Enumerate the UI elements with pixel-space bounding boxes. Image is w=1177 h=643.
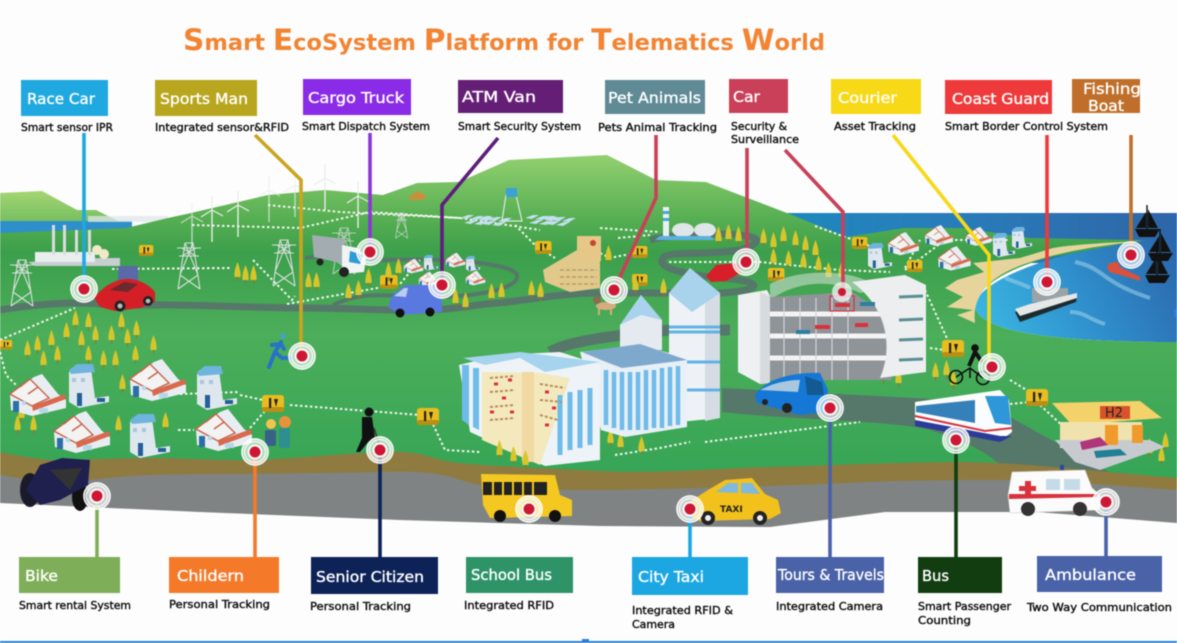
- callout: pet animals: Pet Animals: [608, 89, 701, 107]
- callout: car: Car: [733, 88, 761, 106]
- callout: ambulance: Ambulance: [1045, 566, 1136, 584]
- van: [388, 285, 442, 318]
- callout: children: [169, 438, 279, 611]
- callout: bus: [918, 426, 1011, 627]
- road: lower wide: [722, 388, 1109, 472]
- callout: cargo truck: Cargo Truck: [308, 89, 404, 107]
- ground: [0, 155, 1177, 480]
- callout: courier: [831, 79, 1006, 381]
- tour bus: [755, 373, 828, 415]
- callout: city taxi: City Taxi: [638, 568, 704, 586]
- runner: [269, 334, 290, 367]
- callout: bus: Bus: [922, 567, 949, 585]
- H2 station: [1052, 401, 1165, 470]
- callout: coast guard: Coast Guard: [952, 90, 1049, 108]
- callout: ambulance: [1026, 488, 1172, 614]
- callout: coast guard: Smart Border Control System: [945, 120, 1108, 133]
- solar panels: [460, 215, 576, 226]
- title: Smart EcoSystem Platform for Telematics World: [183, 23, 825, 57]
- callout: sports man: Sports Man: [160, 90, 248, 108]
- callout: senior citizen: Personal Tracking: [310, 600, 411, 613]
- houses: coast cluster: [868, 225, 1032, 271]
- school bus: [481, 474, 572, 522]
- tan factory: [543, 236, 601, 292]
- ambulance: [1008, 465, 1100, 516]
- road: main: [0, 234, 757, 310]
- callout: bus: Smart Passenger: [918, 600, 1011, 613]
- callout: bike: Bike: [25, 567, 58, 585]
- callout: bike: Smart rental System: [19, 599, 131, 612]
- cyclist: [950, 345, 990, 384]
- callout: cargo truck: Smart Dispatch System: [302, 120, 430, 133]
- lagoon: [975, 213, 1177, 342]
- callout: ATM van: ATM Van: [462, 88, 536, 106]
- road: soil band: [0, 452, 1177, 492]
- callout: tours and travels: [776, 394, 884, 613]
- callout: pet animals: [598, 80, 717, 304]
- callout: ATM van: [428, 80, 581, 299]
- city bus: [915, 390, 1012, 442]
- beach: [945, 241, 1143, 323]
- black sailboats: [1135, 205, 1173, 283]
- callout: children: Personal Tracking: [169, 598, 270, 611]
- landscape: [0, 155, 1177, 527]
- trees: [14, 224, 1169, 465]
- senior citizen: [356, 408, 379, 452]
- callout: cargo truck: [302, 79, 430, 266]
- callout: race car: Race Car: [27, 90, 96, 108]
- red sports car: [94, 266, 155, 312]
- H2 station: H2: [1105, 406, 1123, 421]
- office block with solar roof: [580, 268, 720, 437]
- callout: ATM van: Smart Security System: [458, 120, 581, 133]
- lagoon waves: [1005, 262, 1150, 324]
- callout: ambulance: Two Way Communication: [1026, 601, 1172, 614]
- callout: tours and travels: Integrated Camera: [776, 600, 883, 613]
- callout: sports man: Integrated sensor&RFID: [155, 121, 289, 134]
- callout: courier: Courier: [838, 89, 898, 107]
- far left hill and water: [0, 191, 168, 236]
- taxi: TAXI: [720, 505, 743, 515]
- callout: car: [729, 79, 799, 276]
- dog: [593, 296, 616, 315]
- callout: bus: Counting: [918, 614, 971, 627]
- callout: car: Security &: [731, 120, 787, 133]
- big cross-section building: [459, 352, 600, 469]
- road: loop: [305, 257, 517, 305]
- callout: senior citizen: Senior Citizen: [316, 568, 424, 586]
- callout: coast guard: [945, 80, 1108, 296]
- motorbike: [20, 458, 90, 511]
- callout: parking surveillance line: [785, 150, 852, 302]
- small orange house: [408, 191, 426, 200]
- callout: race car: [21, 80, 113, 303]
- children: [265, 416, 291, 448]
- taxi: [688, 478, 781, 525]
- houses: left village: [10, 359, 252, 458]
- callout: school bus: Integrated RFID: [464, 599, 554, 612]
- red convertible: [706, 263, 742, 282]
- power station: [28, 225, 120, 266]
- truck: [312, 235, 366, 277]
- callout: bike: [19, 482, 131, 612]
- callout: fishing boat: [1072, 79, 1145, 269]
- callout: courier: Asset Tracking: [834, 120, 916, 133]
- callout: sports man: [155, 80, 316, 370]
- wind turbines: [181, 164, 369, 248]
- sea: [787, 213, 1177, 263]
- callout: tours and travels: Tours & Travels: [777, 566, 884, 584]
- dotted network: [0, 205, 1065, 455]
- power plant and tanks: [655, 207, 716, 240]
- road: asphalt band: [0, 472, 1177, 527]
- callout: senior citizen: [310, 436, 438, 613]
- callout: race car: Smart sensor IPR: [21, 121, 113, 134]
- callout: city taxi: [632, 495, 748, 631]
- callout: school bus: [464, 495, 573, 612]
- water tower: [502, 188, 522, 221]
- callout: school bus: School Bus: [471, 566, 552, 584]
- callout: children: Childern: [177, 567, 244, 585]
- road: centre: [550, 330, 730, 352]
- callout: fishing boat: Fishing: [1083, 80, 1141, 98]
- callout: city taxi: Integrated RFID &: [632, 604, 733, 617]
- parking structure: [738, 273, 926, 384]
- callout: car: Surveillance: [731, 133, 799, 146]
- houses: loop cluster: [404, 253, 485, 286]
- pylons: [10, 213, 408, 306]
- coast guard boat: [1107, 262, 1140, 281]
- cargo ship: [1015, 288, 1077, 322]
- callout: city taxi: Camera: [632, 618, 675, 631]
- callout: pet animals: Pets Animal Tracking: [598, 121, 717, 134]
- information boxes: [0, 237, 1048, 425]
- callout: fishing boat: Boat: [1088, 97, 1124, 115]
